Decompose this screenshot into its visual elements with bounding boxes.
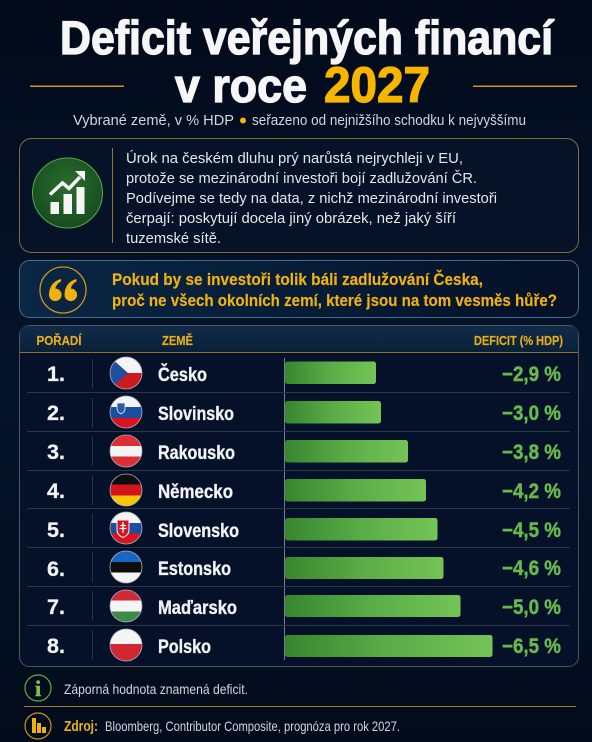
source: Zdroj: (64, 719, 98, 735)
table header: POŘADÍ (36, 333, 82, 348)
row: Rakousko: Rakousko (158, 443, 235, 464)
intro text: tuzemské sítě. (126, 231, 221, 247)
icon: growth chart (32, 158, 102, 228)
row: Rakousko: −3,8 % (502, 441, 561, 464)
row: Česko: 1. (47, 362, 65, 386)
row: Slovensko: Slovensko (158, 521, 239, 542)
panel: intro (20, 138, 578, 252)
row: Německo (47, 474, 561, 506)
title: v roce (175, 59, 307, 112)
row: Slovensko: 5. (47, 518, 65, 542)
icon: info (25, 675, 51, 701)
row: Slovensko (47, 512, 561, 544)
panel: ranking table (20, 326, 578, 666)
axis (284, 358, 285, 660)
note (25, 675, 248, 701)
row: Slovinsko (47, 396, 561, 428)
row: Rakousko: 3. (47, 440, 65, 464)
row: Estonsko: Estonsko (158, 559, 231, 580)
row: Německo: 4. (47, 479, 65, 503)
intro text: čerpají: poskytují docela jiný obrázek, než jaký šíří (126, 211, 456, 227)
subtitle (73, 113, 526, 129)
row: Estonsko (47, 551, 561, 584)
row: Slovinsko: Slovinsko (158, 404, 234, 425)
row: Slovinsko: 2. (47, 401, 65, 425)
row: Polsko: −6,5 % (502, 635, 561, 658)
row: Rakousko (47, 435, 561, 467)
title: 2027 (324, 57, 430, 113)
intro text: Úrok na českém dluhu prý narůstá nejrychleji v EU, (126, 150, 463, 167)
row: Estonsko: −4,6 % (502, 557, 561, 580)
title: Deficit veřejných financí (60, 11, 555, 64)
icon: quote mark (40, 267, 86, 313)
quote text (112, 270, 557, 310)
row: Maďarsko: −5,0 % (502, 596, 561, 619)
footer divider (24, 706, 576, 707)
row: Maďarsko (47, 590, 561, 622)
row: Polsko: 8. (47, 634, 65, 658)
intro text: protože se mezinárodní investoři bojí zadlužování ČR. (126, 170, 477, 187)
row: Česko: −2,9 % (502, 363, 561, 386)
intro text (126, 150, 497, 247)
row: Německo: −4,2 % (502, 480, 561, 503)
row: Maďarsko: Maďarsko (158, 598, 237, 619)
intro text: Podívejme se tedy na data, z nichž mezinárodní investoři (126, 191, 497, 207)
icon: source chart (25, 713, 51, 739)
quote text: Pokud by se investoři tolik báli zadlužování Česka, (112, 270, 483, 289)
icon: info: i (35, 676, 41, 701)
title (60, 11, 555, 113)
row: Polsko: Polsko (158, 637, 211, 658)
intro divider (112, 148, 113, 243)
quote text: proč ne všech okolních zemí, které jsou na tom vesměs hůře? (112, 292, 557, 310)
row: Česko: Česko (158, 364, 207, 386)
table header: ZEMĚ (162, 333, 193, 348)
table header: DEFICIT (% HDP) (474, 333, 563, 348)
table header (20, 326, 578, 353)
note: Záporná hodnota znamená deficit. (64, 681, 248, 697)
panel: quote (20, 260, 578, 318)
subtitle: Vybrané země, v % HDP (73, 113, 234, 129)
row: Česko (47, 357, 561, 389)
title rule left (30, 86, 124, 87)
title rule right (473, 86, 577, 87)
row: Slovinsko: −3,0 % (502, 402, 561, 425)
source (25, 713, 400, 739)
row: Polsko (47, 629, 561, 661)
source: Bloomberg, Contributor Composite, prognóza pro rok 2027. (105, 718, 400, 734)
row: Německo: Německo (158, 482, 233, 503)
subtitle: seřazeno od nejnižšího schodku k nejvyššímu (252, 113, 526, 129)
row: Slovensko: −4,5 % (502, 519, 561, 542)
row: Maďarsko: 7. (47, 595, 65, 619)
row: Estonsko: 6. (47, 557, 65, 581)
